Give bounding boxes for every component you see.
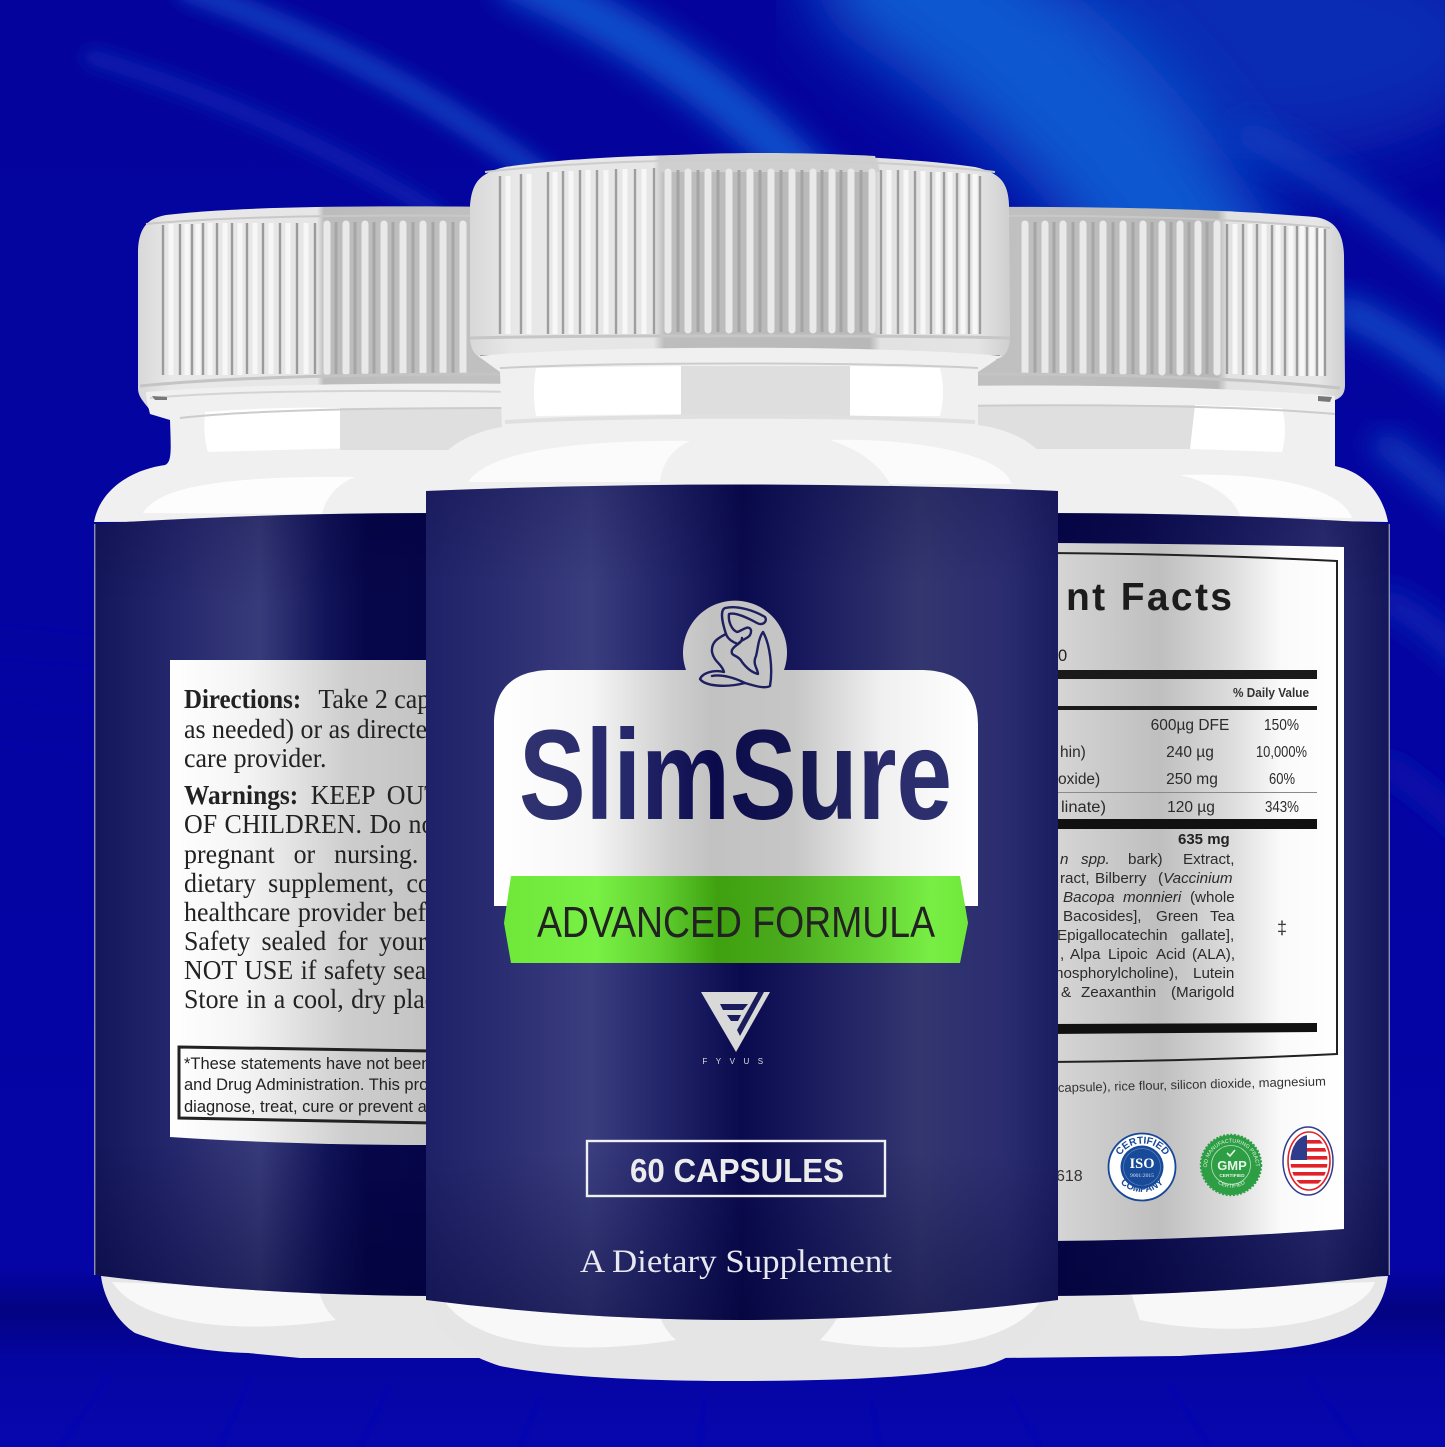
proprietary blend text: Bacopa <box>1063 889 1115 906</box>
directions text: Directions: <box>184 684 301 714</box>
badge: ISO: CERTIFIED <box>1116 1136 1169 1154</box>
badge: ISO: ISO <box>1130 1156 1154 1172</box>
proprietary blend text: Bacosides], <box>1063 908 1142 925</box>
directions text <box>184 684 482 773</box>
nutrient rows: linate) <box>1061 799 1106 816</box>
nutrient rows: 600µg DFE <box>1151 717 1229 734</box>
proprietary blend text: Epigallocatechin <box>1057 927 1168 944</box>
front bottle neck and shoulder <box>426 348 1058 490</box>
advanced formula banner <box>504 876 968 963</box>
nutrient rows: 10,000% <box>1256 744 1307 761</box>
thick rule <box>1050 1023 1317 1034</box>
proprietary blend text: & <box>1061 984 1071 1001</box>
nutrient rows: 240 µg <box>1166 744 1214 761</box>
proprietary blend text: Vaccinium <box>1163 870 1233 887</box>
warnings text: KEEP OUT <box>311 780 440 810</box>
badge: ISO <box>1108 1132 1176 1202</box>
icon: muscular figure logo <box>700 607 771 687</box>
proprietary blend text <box>1055 831 1287 1001</box>
left bottle cap <box>138 206 515 410</box>
proprietary blend text: (ALA), <box>1192 946 1235 963</box>
proprietary blend text: n <box>1060 851 1068 868</box>
advanced formula banner: ADVANCED FORMULA <box>537 898 936 947</box>
facts title: nt Facts <box>1066 576 1232 619</box>
front bottle cap <box>470 153 1010 360</box>
right bottle cap <box>965 207 1345 400</box>
nutrient rows: 343% <box>1265 799 1299 816</box>
nutrient rows: oxide) <box>1058 771 1100 788</box>
left bottle <box>94 206 520 1358</box>
warnings text: pregnant or nursing. If <box>184 839 455 869</box>
nutrient rows <box>1050 717 1317 816</box>
warnings text: healthcare provider before <box>184 897 459 927</box>
proprietary blend text: Tea <box>1210 908 1235 925</box>
nutrient rows: 60% <box>1269 771 1295 788</box>
directions text: care provider. <box>184 743 326 773</box>
dietary supplement line: A Dietary Supplement <box>580 1244 892 1280</box>
FDA disclaimer box: *These statements have not been <box>184 1054 430 1073</box>
right bottle neck and shoulder <box>960 385 1388 522</box>
proprietary blend text: bark) <box>1128 851 1163 868</box>
badge: GMP <box>1200 1134 1262 1196</box>
proprietary blend text: hosphorylcholine), <box>1055 965 1178 982</box>
proprietary blend text: monnieri <box>1123 889 1182 906</box>
directions text: Take 2 capsules <box>318 684 482 714</box>
FDA disclaimer box: and Drug Administration. This product <box>184 1075 460 1094</box>
proprietary blend text: spp. <box>1081 851 1110 868</box>
left bottle label <box>94 513 430 1296</box>
right bottle <box>978 206 1390 1358</box>
capsule count box <box>587 1141 885 1196</box>
warnings text: NOT USE if safety seal <box>184 955 433 985</box>
brand plate <box>494 601 978 906</box>
badge: USA flag <box>1283 1127 1335 1195</box>
proprietary blend text: Zeaxanthin <box>1081 984 1156 1001</box>
proprietary blend text: ( <box>1158 870 1163 887</box>
brand name: SlimSure <box>519 704 952 847</box>
badge: GMP: CERTIFIED <box>1218 1180 1244 1188</box>
directions panel <box>170 660 482 1145</box>
daily value heading: % Daily Value <box>1233 685 1309 700</box>
front bottle base <box>428 1298 1056 1381</box>
proprietary blend text: (Marigold <box>1171 984 1234 1001</box>
proprietary blend text: ‡ <box>1277 918 1287 938</box>
warnings text: OF CHILDREN. Do not <box>184 809 442 839</box>
proprietary blend text: 635 mg <box>1178 831 1230 848</box>
right bottle base <box>1000 1276 1388 1358</box>
proprietary blend text: , <box>1060 946 1064 963</box>
proprietary blend text: Extract, <box>1183 851 1234 868</box>
warnings text <box>184 780 482 1014</box>
fyvus logo <box>701 992 772 1066</box>
phone digits: 618 <box>1056 1168 1083 1185</box>
other ingredients text: capsule), rice flour, silicon dioxide, magnesium <box>1058 1074 1326 1095</box>
FDA disclaimer box <box>179 1047 460 1123</box>
nutrient rows: 150% <box>1264 717 1299 734</box>
proprietary blend text: Lutein <box>1193 965 1234 982</box>
supplement facts panel <box>1055 543 1344 1241</box>
proprietary blend text: Acid <box>1156 946 1186 963</box>
medium rule <box>1050 706 1317 710</box>
fyvus logo: FYVUS <box>702 1057 772 1066</box>
FDA disclaimer box: diagnose, treat, cure or prevent any <box>184 1097 445 1116</box>
proprietary blend text: gallate], <box>1181 927 1234 944</box>
panel frame <box>1050 553 1337 1062</box>
badge: GMP: GOOD MANUFACTURING PRACTICE <box>1203 1138 1260 1168</box>
warnings text: Warnings: <box>184 780 298 810</box>
warnings text: dietary supplement, consult <box>184 868 482 898</box>
right bottle label <box>1050 513 1390 1296</box>
capsule count box: 60 CAPSULES <box>630 1152 844 1189</box>
thick rule <box>1050 670 1317 679</box>
warnings text: Safety sealed for your <box>184 926 427 956</box>
servings number: 0 <box>1058 647 1067 665</box>
badge: GMP: GMP <box>1217 1158 1247 1173</box>
front bottle label <box>426 484 1058 1320</box>
left bottle neck and shoulder <box>94 384 520 522</box>
proprietary blend text: (whole <box>1190 889 1235 906</box>
proprietary blend text: Green <box>1156 908 1198 925</box>
nutrient rows: 120 µg <box>1167 799 1215 816</box>
left bottle base <box>101 1276 480 1358</box>
front bottle <box>426 153 1058 1381</box>
proprietary blend text: Alpa <box>1070 946 1101 963</box>
badge: ISO: 9001:2015 <box>1130 1173 1154 1179</box>
nutrient rows: 250 mg <box>1166 771 1218 788</box>
directions text: as needed) or as directed by <box>184 714 473 744</box>
proprietary blend text: Bilberry <box>1095 870 1147 887</box>
thick rule <box>1050 819 1317 829</box>
badge: GMP: CERTIFIED <box>1219 1173 1245 1179</box>
proprietary blend text: Lipoic <box>1108 946 1148 963</box>
proprietary blend text: ract, <box>1060 870 1090 887</box>
badge: ISO: COMPANY <box>1122 1179 1162 1192</box>
nutrient rows: hin) <box>1060 744 1086 761</box>
warnings text: Store in a cool, dry place <box>184 984 448 1014</box>
